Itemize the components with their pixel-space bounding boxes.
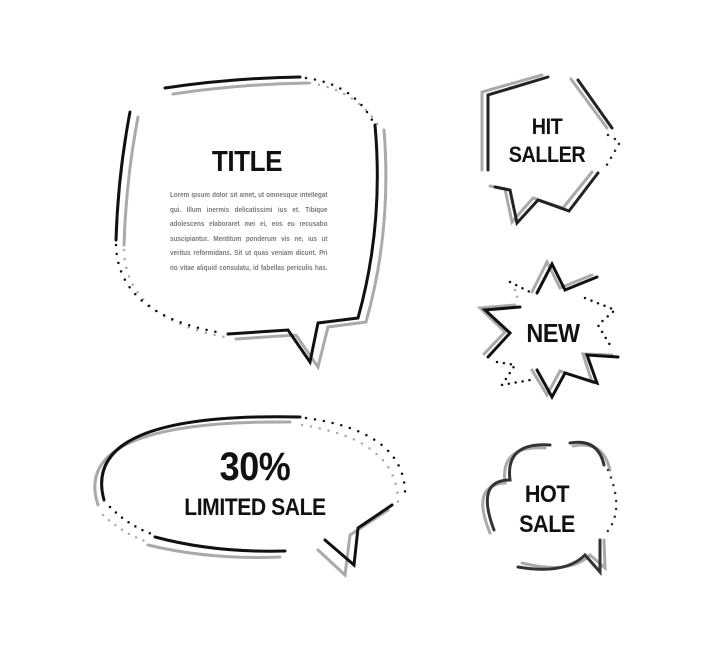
hot sale text: SALE [519,511,575,538]
body text: veritus reformidans. Sit ut quas veniam dicunt. Pri [170,250,328,257]
big title bubble [116,77,386,367]
hit saller text: SALLER [509,142,585,167]
new text: NEW [526,318,580,348]
body text: Lorem ipsum dolor sit amet, ut omnesque intellegat [170,192,328,199]
hit saller text [509,114,586,167]
30% ellipse [95,417,405,575]
hit saller text: HIT [532,114,562,139]
title: TITLE [212,146,282,178]
body text: suscipiantur. Mentitum ponderum vis ne, ius ut [170,236,328,243]
hit saller hexagon [482,75,620,223]
30% text: 30% [220,445,290,489]
hot sale text [519,481,575,538]
hot sale text: HOT [525,481,569,508]
body text: no vitae aliquid consulatu, id fabellas periculis has. [170,265,328,272]
new starburst [480,262,618,397]
body text: qui. Illum inermis delicatissimi ius et. Tibique [170,207,328,214]
hot sale cloud [483,442,616,572]
limited sale text: LIMITED SALE [184,494,326,521]
body text: adolescens elaboraret mei ei, eos eu recusabo [170,221,328,228]
body text [170,192,328,272]
